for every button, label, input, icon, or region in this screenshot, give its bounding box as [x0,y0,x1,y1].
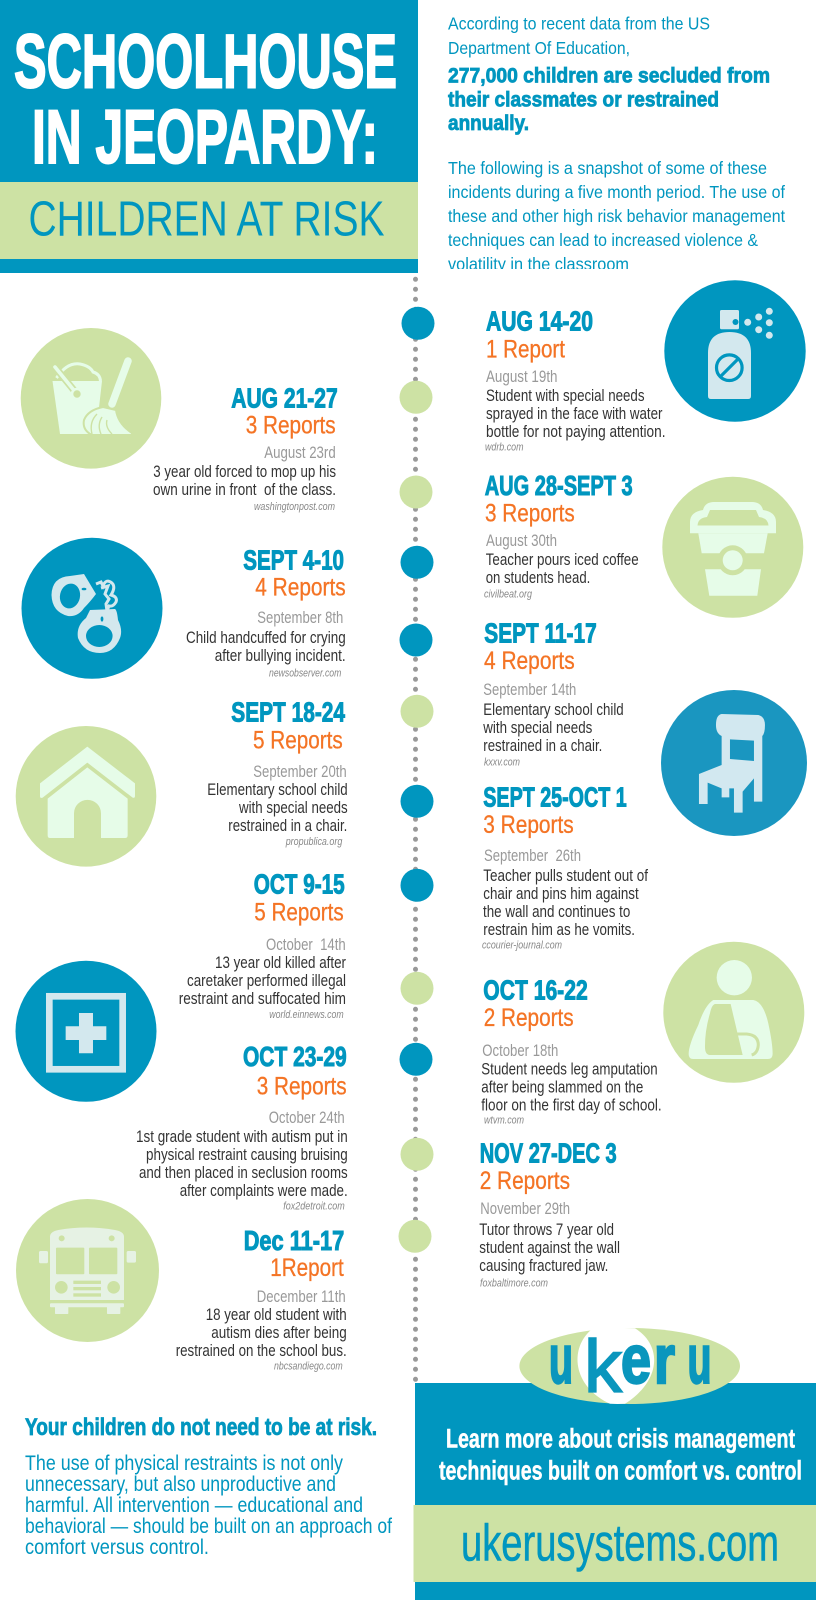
description: physical restraint causing bruising [146,1146,348,1164]
description: 3 year old forced to mop up his [153,463,336,481]
description: sprayed in the face with water [486,405,663,423]
event: SEPT 4-10 [186,544,346,680]
icon: coffee cup [662,477,803,618]
report count: 5 Reports [254,900,344,927]
description: 1st grade student with autism put in [136,1128,348,1146]
description [136,1128,348,1200]
icon: spray bottle [664,280,806,422]
description: after complaints were made. [180,1182,348,1200]
incident date: August 30th [486,532,557,550]
incident date: October 18th [482,1042,558,1060]
report count: 2 Reports [484,1005,574,1032]
description: restrained on the school bus. [176,1342,347,1360]
intro text block: their classmates or restrained [448,88,719,112]
title: SCHOOLHOUSE [14,20,397,104]
incident date: September 26th [484,847,581,865]
description: chair and pins him against [483,885,639,903]
source: civilbeat.org [484,588,533,600]
closing message [25,1414,392,1559]
icon: medical cross [16,961,156,1102]
intro text block: annually. [448,111,529,135]
report count: 5 Reports [253,727,343,754]
incident date: October 14th [266,936,346,954]
report count: 2 Reports [480,1168,570,1195]
description: causing fractured jaw. [479,1257,608,1275]
closing paragraph: behavioral — should be built on an approach of [25,1514,392,1538]
description [176,1306,347,1360]
description: restrained in a chair. [228,817,347,835]
report count: 3 Reports [246,412,336,439]
event: SEPT 25-OCT 1 [482,782,648,951]
description: on students head. [486,569,590,587]
date range: AUG 14-20 [486,306,593,336]
closing paragraph: unnecessary, but also unproductive and [25,1472,336,1496]
description [481,1060,662,1114]
closing heading: Your children do not need to be at risk. [25,1414,377,1441]
incident date: September 14th [483,681,576,699]
date range: Dec 11-17 [244,1225,344,1256]
incident date: December 11th [257,1288,346,1306]
description: 13 year old killed after [215,954,346,972]
description: restrained in a chair. [483,737,602,755]
report count: 4 Reports [255,575,346,602]
description [186,629,346,665]
intro text block: volatility in the classroom [448,254,629,274]
report count: 3 Reports [483,812,574,839]
report count: 3 Reports [485,500,575,528]
description: Tutor throws 7 year old [479,1221,614,1239]
description [179,954,346,1008]
description [479,1221,620,1275]
description [483,867,648,939]
logo: ukeru: k [584,1325,623,1408]
icon: handcuffs [22,538,162,679]
description: Student with special needs [486,387,644,405]
intro text block: these and other high risk behavior management [448,206,785,226]
description: 18 year old student with [206,1306,347,1324]
source: wtvm.com [484,1115,524,1127]
intro text block: The following is a snapshot of some of these [448,158,767,178]
icon: arm sling [663,942,804,1083]
logo: ukeru: u [688,1321,712,1398]
source: fox2detroit.com [283,1201,345,1213]
date range: SEPT 25-OCT 1 [483,782,627,813]
call to action panel [414,1383,816,1600]
intro text block: Department Of Education, [448,38,630,58]
date range: AUG 21-27 [231,382,338,413]
title: IN JEOPARDY: [32,95,378,180]
description: restrain him as he vomits. [483,921,635,939]
logo: ukeru [519,1321,740,1408]
event: AUG 28-SEPT 3 [484,470,639,600]
closing paragraph: comfort versus control. [25,1535,209,1559]
event: AUG 14-20 [485,306,666,454]
date range: AUG 28-SEPT 3 [485,470,633,501]
description: with special needs [238,799,348,817]
source: kxxv.com [484,757,520,769]
description [486,387,666,441]
source: nbcsandiego.com [274,1361,343,1373]
source: washingtonpost.com [254,501,335,513]
description: bottle for not paying attention. [486,423,666,441]
event: SEPT 11-17 [482,617,624,769]
timeline [398,279,434,1380]
description [482,701,624,755]
incident date: September 8th [257,609,343,627]
subtitle: CHILDREN AT RISK [28,192,384,246]
intro text block: incidents during a five month period. The use of [448,182,785,202]
date range: NOV 27-DEC 3 [480,1137,617,1168]
event: AUG 21-27 [153,382,338,513]
date range: OCT 23-29 [243,1041,347,1072]
description [486,551,639,587]
description: after bullying incident. [215,647,346,665]
closing paragraph [25,1451,392,1559]
description: Teacher pulls student out of [483,867,648,885]
date range: OCT 16-22 [483,974,588,1005]
incident date: October 24th [269,1109,345,1127]
intro text block [448,14,785,274]
description: Student needs leg amputation [481,1060,658,1078]
icon: mop and bucket [21,328,161,469]
event: OCT 9-15 [179,868,346,1021]
date range: OCT 9-15 [254,868,345,899]
date range: SEPT 4-10 [243,544,344,575]
incident date: August 23rd [264,444,336,462]
description: the wall and continues to [483,903,630,921]
logo: ukeru: e [621,1321,651,1398]
description: and then placed in seclusion rooms [139,1164,348,1182]
description: restraint and suffocated him [179,990,346,1008]
incident date: August 19th [486,368,558,386]
description: Elementary school child [483,701,624,719]
incident date: September 20th [253,763,347,781]
source: ccourier-journal.com [482,939,562,951]
description: Child handcuffed for crying [186,629,346,647]
description: Elementary school child [207,781,348,799]
date range: SEPT 18-24 [231,697,346,728]
intro text block: techniques can lead to increased violence & [448,230,758,250]
event: Dec 11-17 [176,1225,347,1373]
description: Teacher pours iced coffee [486,551,639,569]
event: SEPT 18-24 [207,697,348,848]
source: propublica.org [285,836,343,848]
intro text block: 277,000 children are secluded from [448,64,770,88]
report count: 4 Reports [484,648,575,675]
date range: SEPT 11-17 [484,617,597,648]
icon: school bus [16,1199,159,1342]
event: NOV 27-DEC 3 [479,1137,620,1290]
description: after being slammed on the [481,1078,643,1096]
logo: ukeru: u [549,1321,573,1398]
event: OCT 23-29 [136,1041,348,1213]
icon: house [16,726,156,867]
icon: chair [661,690,807,836]
description: floor on the first day of school. [481,1096,662,1114]
description [207,781,348,835]
closing paragraph: harmful. All intervention — educational and [25,1493,363,1517]
description: autism dies after being [211,1324,347,1342]
description: student against the wall [479,1239,620,1257]
logo: ukeru: r [654,1321,675,1398]
closing paragraph: The use of physical restraints is not only [25,1451,343,1475]
description [153,463,336,499]
header panel [0,0,418,273]
title [14,20,397,180]
source: newsobserver.com [269,668,341,680]
source: wdrb.com [485,442,524,454]
incident date: November 29th [480,1200,570,1218]
description: own urine in front of the class. [153,481,336,499]
source: world.einnews.com [269,1009,344,1021]
source: foxbaltimore.com [480,1278,548,1290]
report count: 3 Reports [257,1073,347,1100]
report count: 1Report [270,1255,344,1282]
description: caretaker performed illegal [187,972,346,990]
call to action text [439,1424,802,1485]
report count: 1 Report [486,336,565,364]
description: with special needs [482,719,592,737]
intro text block: According to recent data from the US [448,14,710,34]
event: OCT 16-22 [481,974,662,1127]
